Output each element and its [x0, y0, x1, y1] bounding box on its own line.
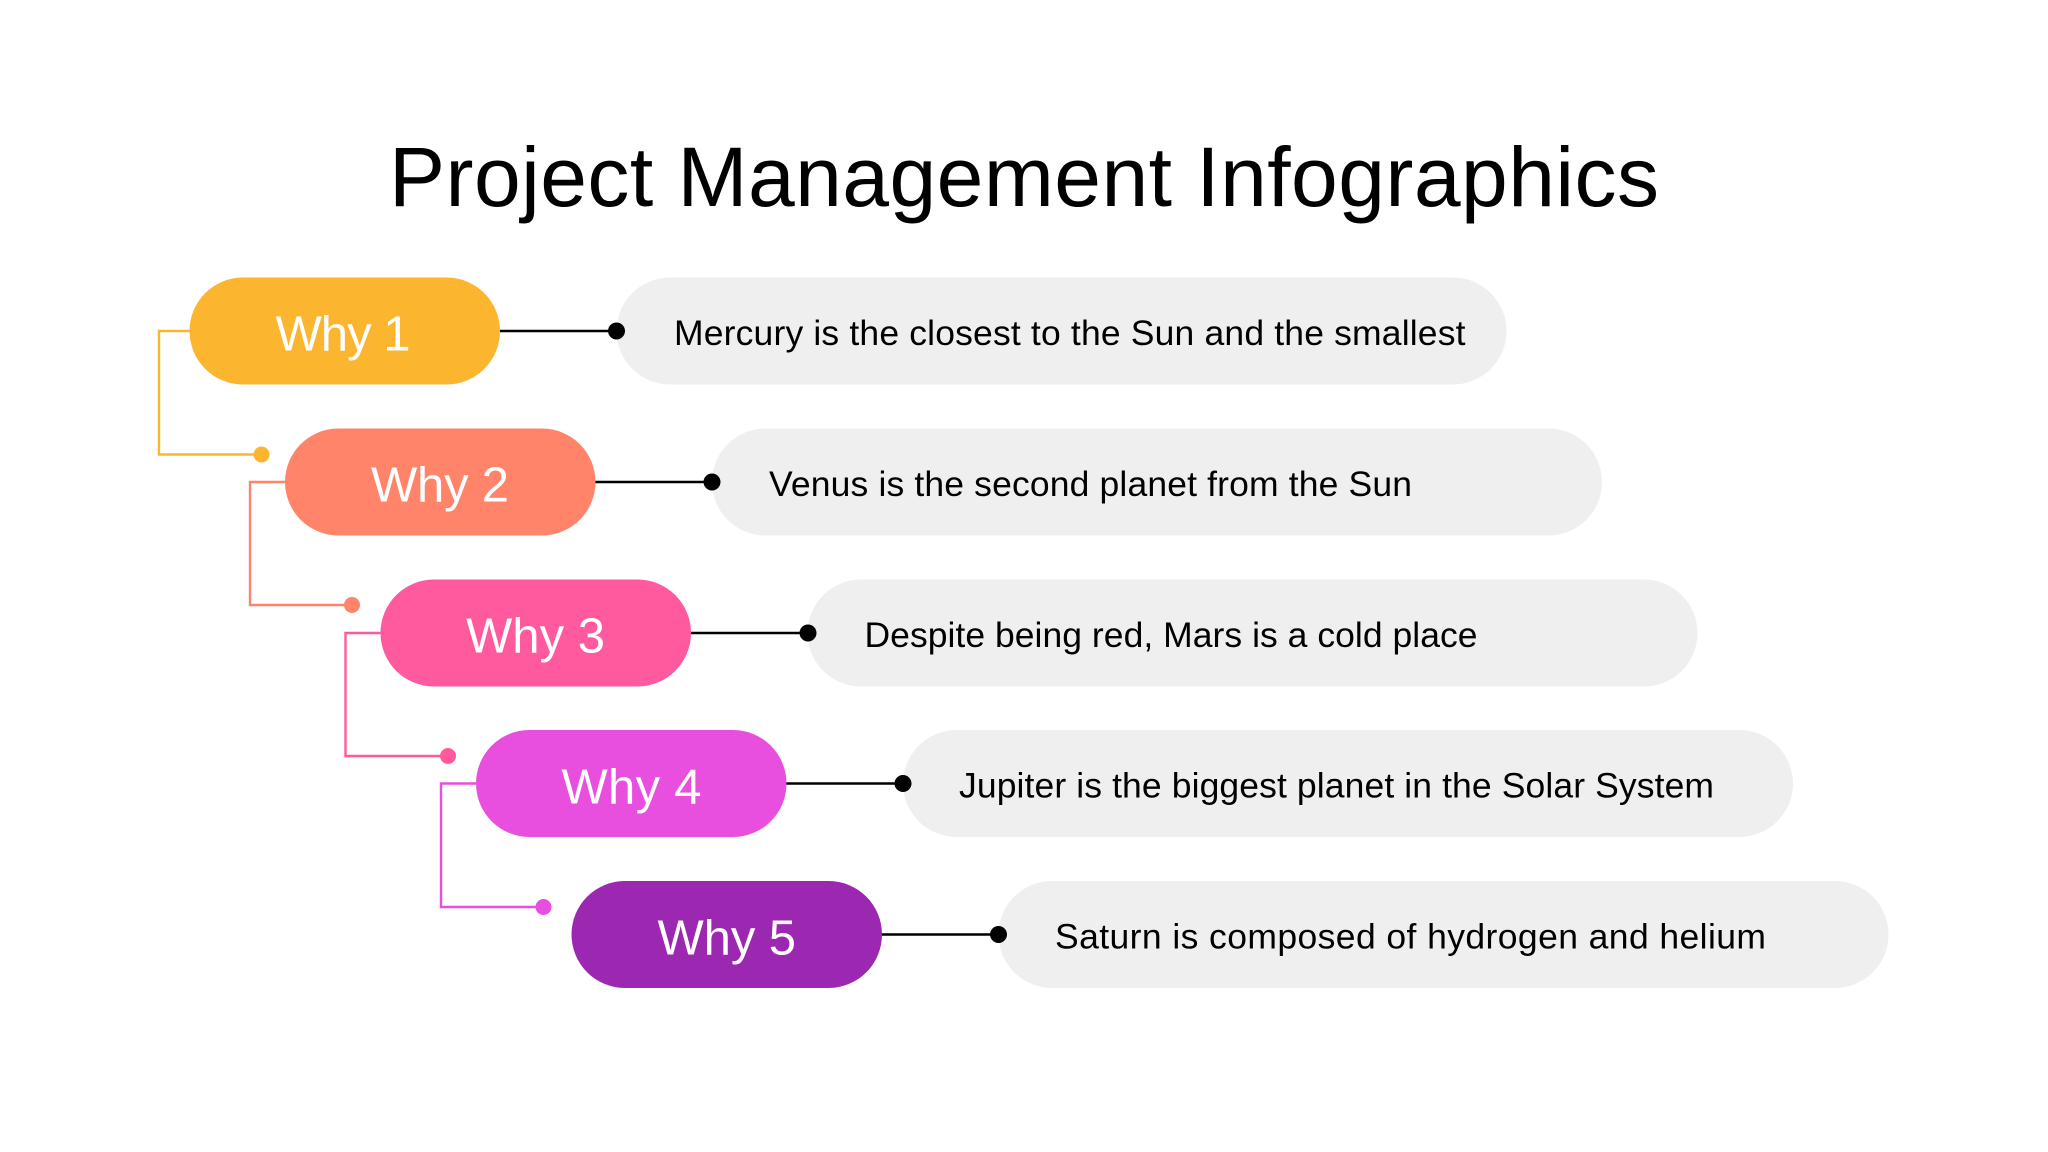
black connector 5	[881, 926, 1007, 943]
label pill 4	[476, 730, 786, 837]
description pill 4: Jupiter is the biggest planet in the Solar System	[959, 766, 1714, 806]
description pill 1	[616, 278, 1506, 384]
label pill 2	[285, 428, 596, 536]
description pill 3: Despite being red, Mars is a cold place	[864, 615, 1478, 655]
colored connector 4	[441, 784, 552, 915]
colored connector 3	[346, 633, 456, 764]
black connector 1	[500, 322, 625, 340]
description pill 5	[998, 881, 1888, 988]
label pill 1: Why 1	[276, 308, 410, 362]
row: why 1	[159, 278, 1506, 462]
description pill 3	[808, 580, 1698, 686]
description pill 5: Saturn is composed of hydrogen and helium	[1055, 916, 1766, 956]
label pill 2: Why 2	[371, 458, 509, 512]
title: Project Management Infographics	[389, 130, 1659, 224]
description pill 1: Mercury is the closest to the Sun and the smallest	[674, 313, 1466, 353]
description pill 4	[903, 730, 1793, 837]
label pill 3: Why 3	[466, 610, 605, 664]
label pill 5	[572, 881, 882, 988]
row: why 5	[572, 881, 1888, 988]
colored connector 1	[159, 331, 270, 462]
label pill 3	[380, 580, 691, 686]
description pill 2	[712, 428, 1602, 536]
label pill 4: Why 4	[562, 760, 702, 814]
row: why 4	[441, 730, 1793, 915]
black connector 3	[690, 624, 816, 642]
row: why 3	[346, 580, 1698, 764]
row: why 2	[250, 428, 1602, 613]
black connector 4	[786, 775, 912, 792]
colored connector 2	[250, 482, 360, 613]
label pill 5: Why 5	[658, 912, 796, 966]
black connector 2	[595, 474, 720, 490]
label pill 1	[190, 278, 500, 384]
description pill 2: Venus is the second planet from the Sun	[769, 464, 1412, 504]
